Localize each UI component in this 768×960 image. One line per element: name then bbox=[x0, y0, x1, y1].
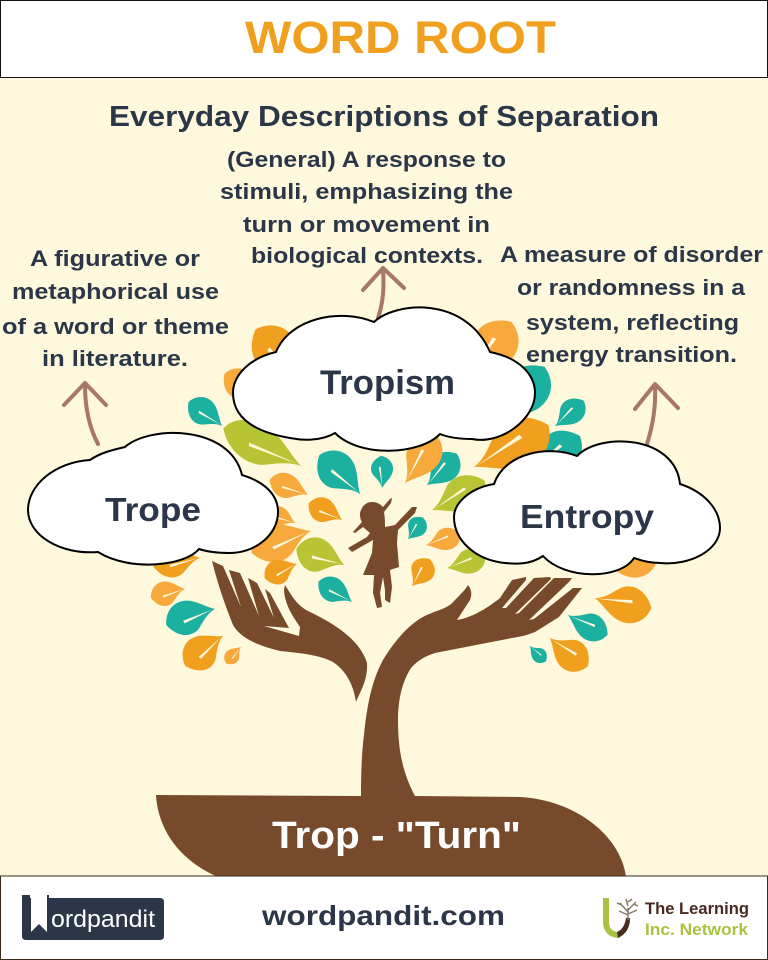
cloud: tropism bbox=[233, 307, 535, 451]
leaves bbox=[149, 309, 659, 680]
arrow: trope bbox=[64, 383, 106, 444]
text block: trope definition: of a word or theme bbox=[2, 314, 229, 339]
text block: tropism definition: turn or movement in bbox=[243, 212, 490, 237]
learning network logo: The Learning bbox=[645, 899, 749, 918]
wordpandit logo bbox=[22, 895, 164, 940]
text block: entropy definition bbox=[500, 242, 763, 367]
root label: Trop - "Turn" bbox=[272, 815, 521, 857]
arrow: entropy bbox=[635, 384, 678, 444]
learning network logo bbox=[606, 898, 749, 939]
footer bbox=[0, 876, 768, 960]
cloud: trope bbox=[28, 433, 278, 565]
learning network logo: Inc. Network bbox=[645, 920, 749, 939]
website: wordpandit.com bbox=[261, 900, 505, 931]
label: Entropy bbox=[520, 498, 655, 535]
text block: entropy definition: energy transition. bbox=[526, 342, 737, 367]
text block: tropism definition: (General) A response to bbox=[227, 147, 506, 172]
title: WORD ROOT bbox=[245, 12, 556, 63]
text block: trope definition: A figurative or bbox=[30, 246, 200, 271]
text block: trope definition bbox=[2, 246, 229, 371]
label: Tropism bbox=[320, 364, 455, 402]
text block: tropism definition: stimuli, emphasizing the bbox=[220, 179, 513, 204]
heading: Everyday Descriptions of Separation bbox=[109, 101, 659, 133]
text block: tropism definition: biological contexts. bbox=[251, 243, 483, 268]
text block: entropy definition: or randomness in a bbox=[517, 275, 746, 300]
arrow: tropism bbox=[363, 268, 404, 318]
text block: trope definition: metaphorical use bbox=[12, 279, 219, 304]
left hand bbox=[212, 561, 367, 702]
text block: tropism definition bbox=[220, 147, 513, 268]
header banner bbox=[0, 0, 768, 78]
text block: entropy definition: system, reflecting bbox=[526, 310, 739, 335]
child silhouette bbox=[348, 498, 417, 608]
wordpandit logo: ordpandit bbox=[51, 906, 155, 933]
label: Trope bbox=[105, 491, 201, 528]
ground and trunk with right hand bbox=[156, 577, 626, 876]
text block: entropy definition: A measure of disorder bbox=[500, 242, 763, 267]
text block: trope definition: in literature. bbox=[42, 346, 188, 371]
tree with hands bbox=[156, 561, 626, 876]
cloud: entropy bbox=[454, 441, 720, 574]
